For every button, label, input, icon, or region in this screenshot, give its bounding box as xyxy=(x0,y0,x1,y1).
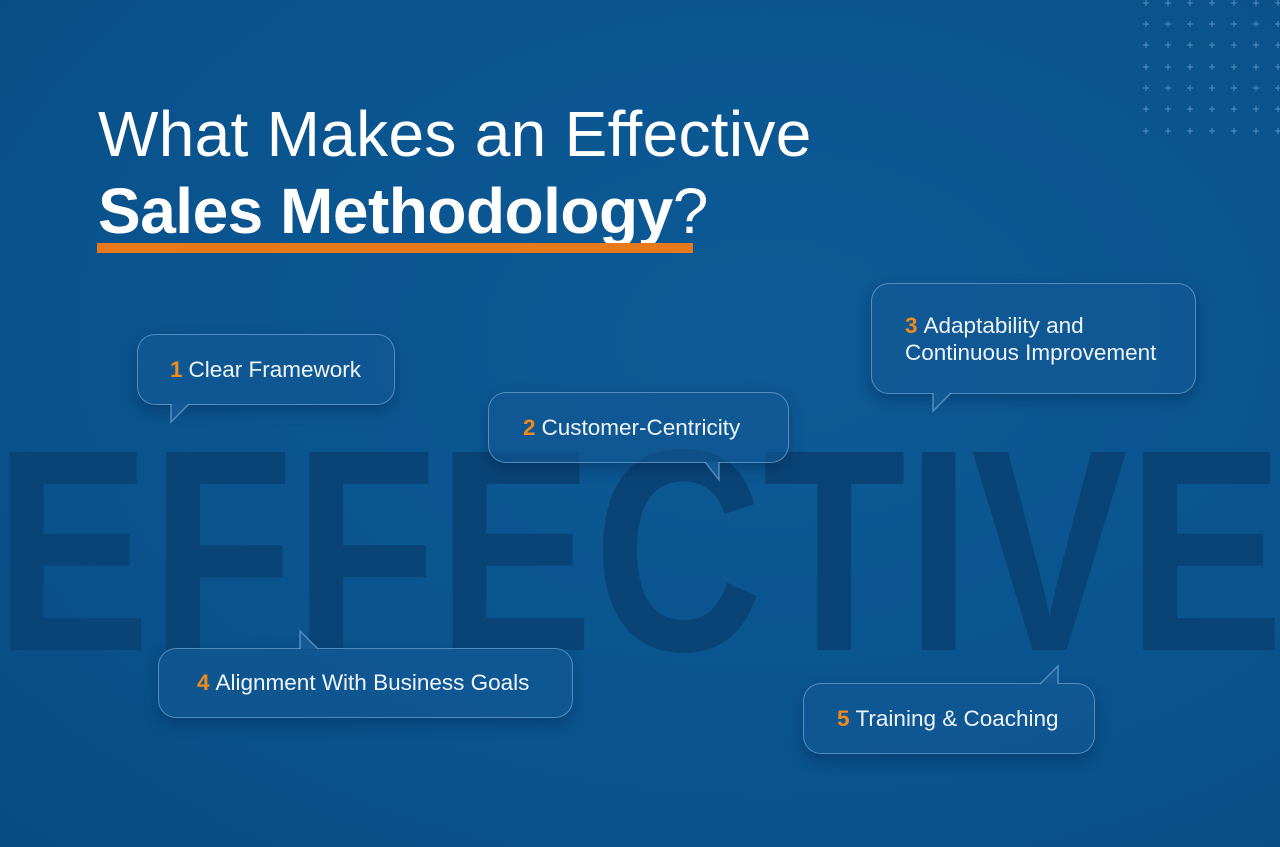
bubble 3: 3 Adaptability and xyxy=(905,312,1084,338)
bubble 5 xyxy=(803,683,1095,754)
bubble 1 xyxy=(137,334,395,405)
title xyxy=(98,98,812,247)
bubble 5: 5 xyxy=(837,706,850,730)
bubble 2: Customer-Centricity xyxy=(542,414,740,440)
title: Sales Methodology? xyxy=(98,175,708,247)
bubble 4 xyxy=(158,648,573,718)
bubble 3: Continuous Improvement xyxy=(905,340,1156,364)
bubble 2: 2 xyxy=(523,414,536,440)
bubble 4: 4 xyxy=(197,670,210,695)
bubble 1: 1 xyxy=(170,356,183,382)
bubble 4: Alignment With Business Goals xyxy=(216,670,529,695)
bubble 2 xyxy=(488,392,789,463)
bubble 3 xyxy=(871,283,1196,394)
bubble 1: Clear Framework xyxy=(189,356,361,382)
title underline xyxy=(97,243,693,253)
bubble 5: Training & Coaching xyxy=(856,706,1059,730)
title: What Makes an Effective xyxy=(98,98,812,170)
